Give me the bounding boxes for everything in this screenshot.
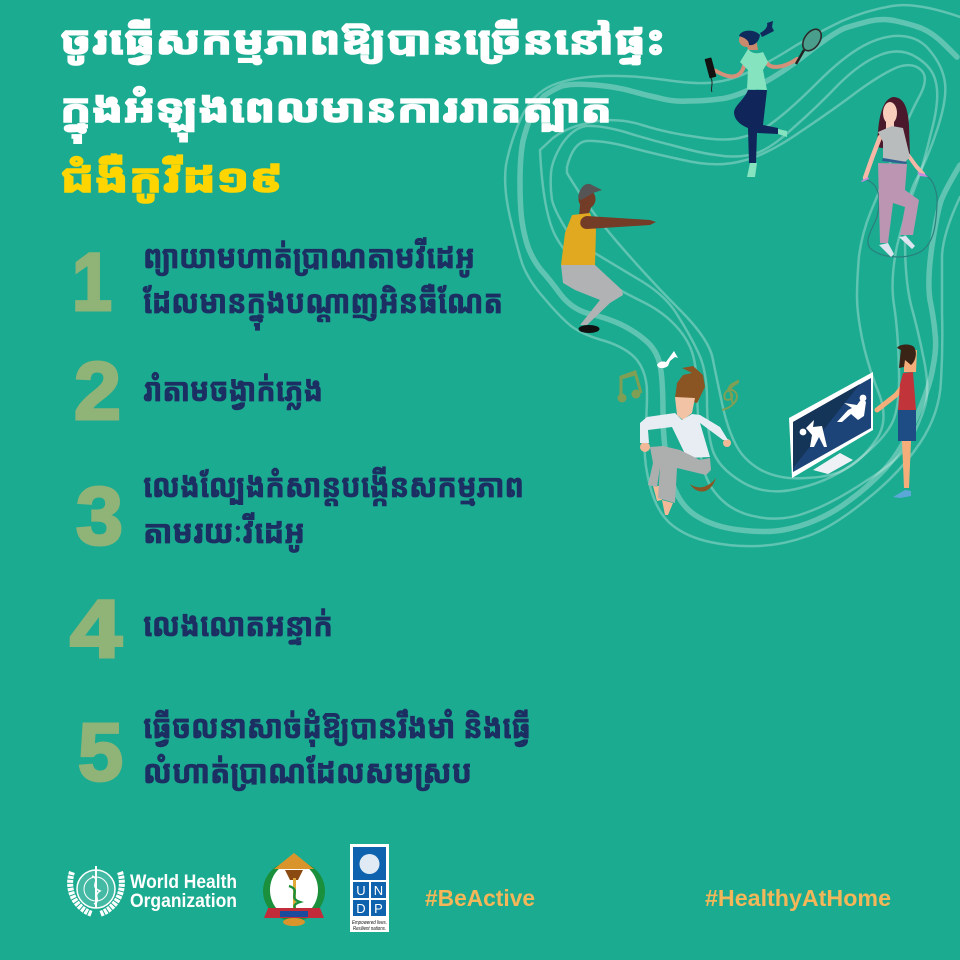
logo: World Health Organization	[70, 866, 237, 914]
item 3 text line 2: តាមរយៈវីដេអូ	[143, 512, 305, 552]
item 5 text line 2: លំហាត់ប្រាណដែលសមស្រប	[143, 754, 472, 791]
item 1 text line 2: ដែលមានក្នុងបណ្តាញអិនធឺណែត	[143, 284, 503, 331]
number 1: 1	[72, 237, 112, 328]
item 4 text: លេងលោតអន្ទាក់	[143, 607, 333, 645]
icon: green music notes	[621, 372, 641, 397]
item 3 text line 1: លេងល្បែងកំសាន្តបង្កើនសកម្មភាព	[143, 466, 524, 506]
icon: head of stretching figure	[800, 429, 806, 435]
icon: green noteheads	[618, 390, 640, 402]
logo: UNDP	[350, 844, 389, 932]
number 3: 3	[76, 471, 123, 562]
title line 3: ជំងឺកូវីដ១៩	[60, 154, 283, 203]
icon: stretching figure	[806, 420, 827, 447]
number 5: 5	[78, 707, 123, 798]
list item 1	[72, 237, 503, 331]
UNDP letters	[356, 883, 383, 916]
hashtag BeActive: #BeActive	[425, 885, 535, 911]
item 1 text line 1: ព្យាយាមហាត់ប្រាណតាមវីដេអូ	[143, 237, 475, 277]
title line 2: ក្នុងអំឡុងពេលមានការរាតត្បាត	[60, 86, 612, 143]
figure: monitor with exercise icons	[789, 372, 873, 478]
figure: man squatting	[561, 184, 656, 333]
list item 2	[74, 346, 323, 437]
list item 3	[76, 466, 524, 562]
item 5 text line 1: ធ្វើចលនាសាច់ដុំឱ្យបានរឹងមាំ និងធ្វើ	[143, 708, 531, 747]
logo: Cambodia Ministry of Health	[263, 853, 325, 926]
icon: treble clef	[722, 381, 738, 410]
icon: white music note	[657, 351, 678, 368]
title line 1: ចូរធ្វើសកម្មភាពឱ្យបានច្រើននៅផ្ទះ	[60, 19, 665, 65]
UNDP letters: N	[374, 883, 383, 898]
WHO name line 2: Organization	[130, 891, 237, 912]
hashtag HealthyAtHome: #HealthyAtHome	[705, 885, 891, 911]
icon: sit-up figure	[837, 398, 866, 422]
item 2 text: រាំតាមចង្វាក់ភ្លេង	[143, 372, 323, 410]
title	[60, 19, 665, 203]
number 4: 4	[70, 584, 122, 675]
figure: woman with tennis racket and controller	[705, 21, 825, 177]
icon: head of sit-up figure	[860, 395, 866, 401]
number 2: 2	[74, 346, 121, 437]
UNDP tagline line 2: Resilient nations.	[353, 926, 386, 932]
figure: man exercising at monitor	[877, 344, 917, 498]
UNDP letters: D	[356, 901, 366, 916]
figure: woman skipping rope	[861, 97, 937, 257]
list item 5	[78, 707, 531, 798]
UNDP letters: P	[374, 901, 383, 916]
list item 4	[70, 584, 333, 675]
figure: woman dancing	[640, 366, 731, 515]
WHO name line 1: World Health	[130, 872, 237, 893]
WHO emblem	[70, 866, 122, 914]
UNDP tagline line 1: Empowered lives.	[352, 920, 387, 926]
UNDP letters: U	[356, 883, 366, 898]
